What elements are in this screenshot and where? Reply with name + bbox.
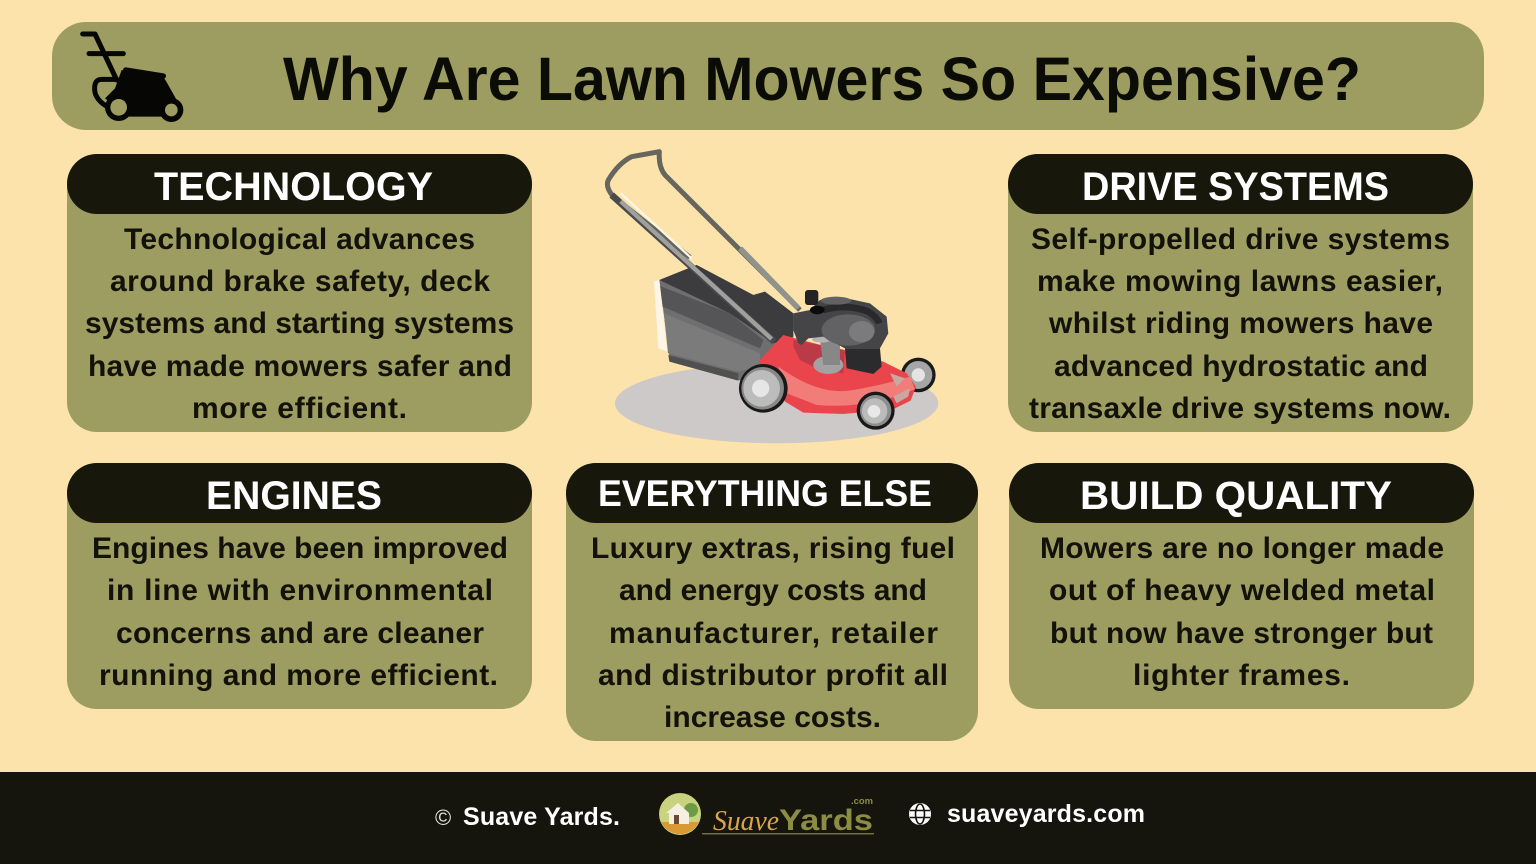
body text: drive systems: advanced hydrostatic and (1054, 350, 1428, 383)
body text: build quality: lighter frames. (1133, 659, 1350, 692)
logo: Suave Yards: Suave (713, 805, 779, 837)
heading bar: build quality: BUILD QUALITY (1080, 474, 1392, 518)
body text: drive systems (1029, 223, 1451, 425)
body text: engines: in line with environmental (107, 574, 493, 607)
mower handle front arm (612, 195, 774, 342)
logo: Suave Yards: Yards (779, 804, 873, 837)
body text: drive systems: make mowing lawns easier, (1037, 265, 1443, 298)
panel: everything else (566, 463, 978, 741)
copyright: Suave Yards. (463, 803, 620, 831)
body text: build quality: out of heavy welded metal (1049, 574, 1435, 607)
body text: engines (92, 532, 508, 692)
footer bar (0, 772, 1536, 864)
illustration: red lawn mower (607, 152, 938, 443)
heading bar: everything else: EVERYTHING ELSE (598, 473, 932, 514)
body text: technology: systems and starting systems (85, 307, 514, 340)
body text: everything else: manufacturer, retailer (609, 617, 938, 650)
body text: engines: concerns and are cleaner (116, 617, 484, 650)
body text: everything else: and distributor profit all (598, 659, 948, 692)
heading bar: engines (67, 463, 532, 523)
panel: drive systems (1008, 154, 1473, 432)
body text: technology: more efficient. (192, 392, 407, 425)
icon: lawn mower silhouette (83, 34, 183, 122)
heading bar: everything else (566, 463, 978, 523)
panel: build quality (1009, 463, 1474, 709)
copyright: © (435, 805, 451, 830)
body text: drive systems: whilst riding mowers have (1048, 307, 1433, 340)
body text: everything else: Luxury extras, rising fuel (591, 532, 955, 565)
body text: technology: Technological advances (124, 223, 475, 256)
red deck (758, 335, 916, 414)
title: Why Are Lawn Mowers So Expensive? (283, 45, 1361, 113)
heading bar: drive systems (1008, 154, 1473, 214)
heading bar: build quality (1009, 463, 1474, 523)
body text: everything else (591, 532, 955, 734)
mower handle rear arm (607, 152, 800, 310)
body text: technology (85, 223, 514, 425)
heading bar: technology: TECHNOLOGY (154, 165, 433, 209)
body text: everything else: increase costs. (664, 701, 881, 734)
body text: everything else: and energy costs and (619, 574, 927, 607)
heading bar: drive systems: DRIVE SYSTEMS (1082, 165, 1389, 209)
ground shadow (615, 363, 938, 443)
body text: technology: have made mowers safer and (88, 350, 512, 383)
panel: technology (67, 154, 532, 432)
body text: build quality: but now have stronger but (1050, 617, 1433, 650)
heading bar: technology (67, 154, 532, 214)
logo: Suave Yards: .com (851, 796, 873, 806)
body text: engines: running and more efficient. (99, 659, 498, 692)
body text: drive systems: Self-propelled drive systems (1031, 223, 1450, 256)
logo: Suave Yards (659, 793, 874, 837)
body text: drive systems: transaxle drive systems now. (1029, 392, 1451, 425)
rear wheel (739, 364, 788, 413)
title banner (52, 22, 1484, 130)
panel: engines (67, 463, 532, 709)
body text: build quality: Mowers are no longer made (1040, 532, 1444, 565)
body text: build quality (1040, 532, 1444, 692)
body text: technology: around brake safety, deck (110, 265, 490, 298)
body text: engines: Engines have been improved (92, 532, 508, 565)
front wheel (857, 392, 895, 430)
grass catcher (659, 265, 793, 381)
website: suaveyards.com (947, 800, 1145, 828)
icon: globe (909, 803, 931, 825)
heading bar: engines: ENGINES (206, 474, 382, 518)
engine (813, 356, 843, 374)
front right wheel (901, 358, 936, 392)
